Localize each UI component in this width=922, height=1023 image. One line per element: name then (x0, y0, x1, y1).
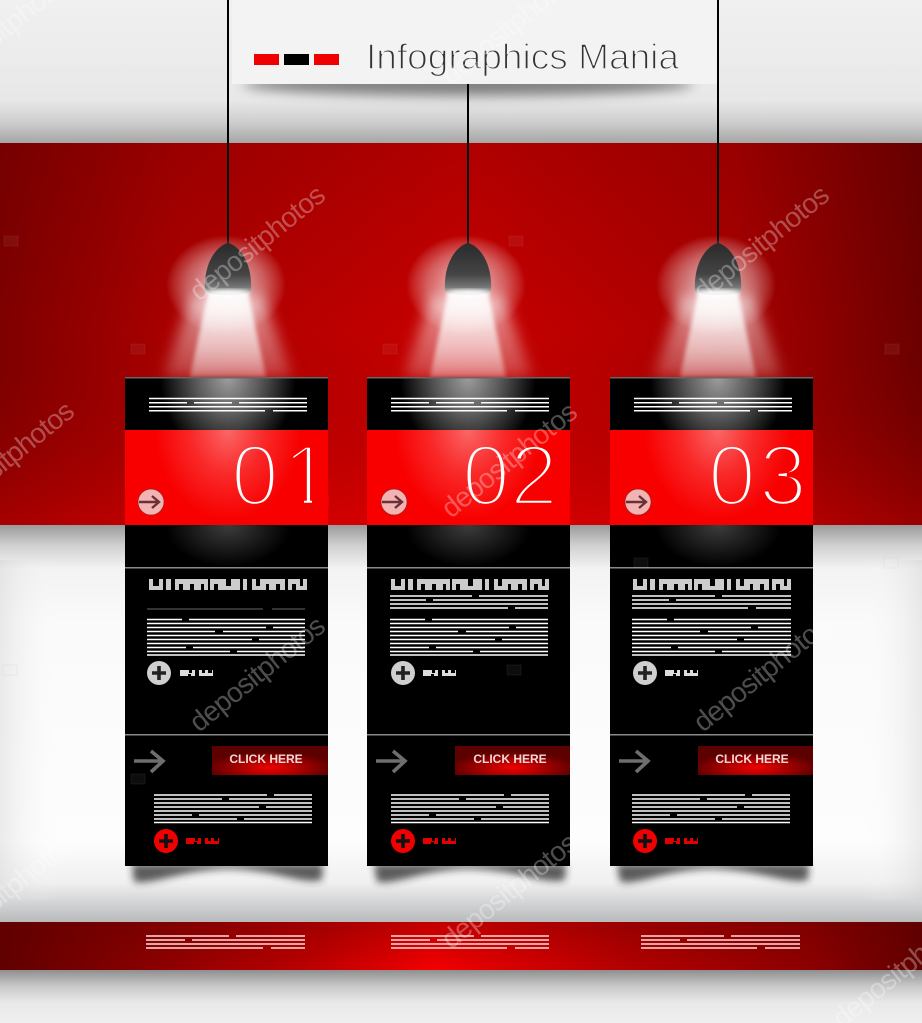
card 1 red greeked link (186, 838, 219, 844)
card 3 click button (698, 746, 813, 775)
card 2 red plus icon (391, 829, 415, 853)
watermark text: depositphotos (183, 179, 331, 307)
card 1 arrow button (138, 489, 164, 515)
card 1 shadow (132, 864, 323, 882)
card 3 lower glow (655, 525, 781, 567)
card 1 greeked link (180, 670, 213, 676)
card 3 text lines (632, 596, 791, 655)
watermark text: depositphotos (687, 179, 835, 307)
background: upper wall (0, 0, 922, 143)
card 1 (125, 377, 331, 866)
footer text lines right (641, 936, 800, 948)
card 1 lower glow (165, 525, 291, 567)
title colour dashes (254, 54, 339, 65)
card 3 arrow button (625, 489, 651, 515)
card 2 grey plus icon (391, 661, 415, 685)
card 2 red number band (367, 428, 570, 525)
card 1 arrow (134, 751, 163, 772)
lamp 2 with light (404, 84, 532, 377)
card 1 text lines (147, 620, 305, 655)
card 1 number: 0 (231, 428, 279, 524)
card 3 click button: CLICK HERE (715, 752, 789, 766)
card 2 arrow button (381, 489, 407, 515)
card 3 header text lines (634, 398, 792, 411)
card 1 click button: CLICK HERE (229, 752, 303, 766)
card 3 red greeked link (665, 838, 698, 844)
card 2 header text lines (391, 398, 549, 411)
card 2 red greeked link (423, 838, 456, 844)
card 3 number (708, 428, 807, 524)
card 3 grey plus icon (633, 661, 657, 685)
card 1 lower text lines (154, 795, 312, 822)
card 2 number: 2 (510, 428, 558, 524)
watermark text: depositphotos (435, 396, 583, 524)
card 3 red plus icon (633, 829, 657, 853)
card 2 (367, 377, 570, 866)
card 2 greeked title (391, 579, 549, 590)
watermark text: depositphotos (183, 610, 331, 738)
card 3 greeked link (665, 670, 698, 676)
card 2 click button (455, 746, 570, 775)
lamp 1 with light (164, 0, 292, 377)
lamp 3 with light (654, 0, 782, 377)
card 1 header glow (160, 377, 296, 430)
card 1 click button (212, 746, 328, 775)
card 1 greeked title (149, 579, 307, 590)
card 3 greeked title (633, 579, 791, 590)
title: Infographics Mania (366, 36, 680, 77)
watermark text: depositphotos (435, 827, 583, 955)
background: lower wall (0, 525, 922, 922)
card 1 red number band (125, 428, 331, 525)
card 2 greeked link (423, 670, 456, 676)
card 2 shadow (374, 864, 566, 882)
card 3 lower text lines (632, 795, 790, 822)
card 3 red number band (610, 428, 813, 525)
card 2 header glow (400, 377, 536, 430)
watermark text: depositphotos (687, 610, 835, 738)
red wall panel (0, 143, 922, 525)
card 2 number (462, 428, 558, 524)
card 3 number: 0 (708, 428, 756, 524)
title panel shadow (243, 72, 693, 96)
card 3 arrow (619, 751, 648, 772)
card 3 number: 3 (759, 428, 807, 524)
card 3 shadow (617, 864, 809, 882)
card 3 header glow (650, 377, 786, 430)
card 1 red plus icon (154, 829, 178, 853)
title panel (232, 0, 717, 84)
card 1 number: 1 (283, 428, 331, 524)
footer text lines left (146, 936, 305, 948)
card 1 number (231, 428, 331, 524)
footer red band (0, 922, 922, 970)
card 2 arrow (376, 751, 405, 772)
card 2 text lines (390, 596, 548, 655)
background: floor (0, 970, 922, 1023)
card 3 (610, 377, 813, 866)
card 1 header text lines (149, 398, 307, 411)
card 2 click button: CLICK HERE (473, 752, 547, 766)
watermark camera icons (3, 236, 899, 784)
card 2 lower text lines (391, 795, 549, 822)
card 2 lower glow (405, 525, 531, 567)
footer text lines centre (391, 936, 549, 948)
card 2 number: 0 (462, 428, 510, 524)
card 1 grey plus icon (147, 661, 171, 685)
